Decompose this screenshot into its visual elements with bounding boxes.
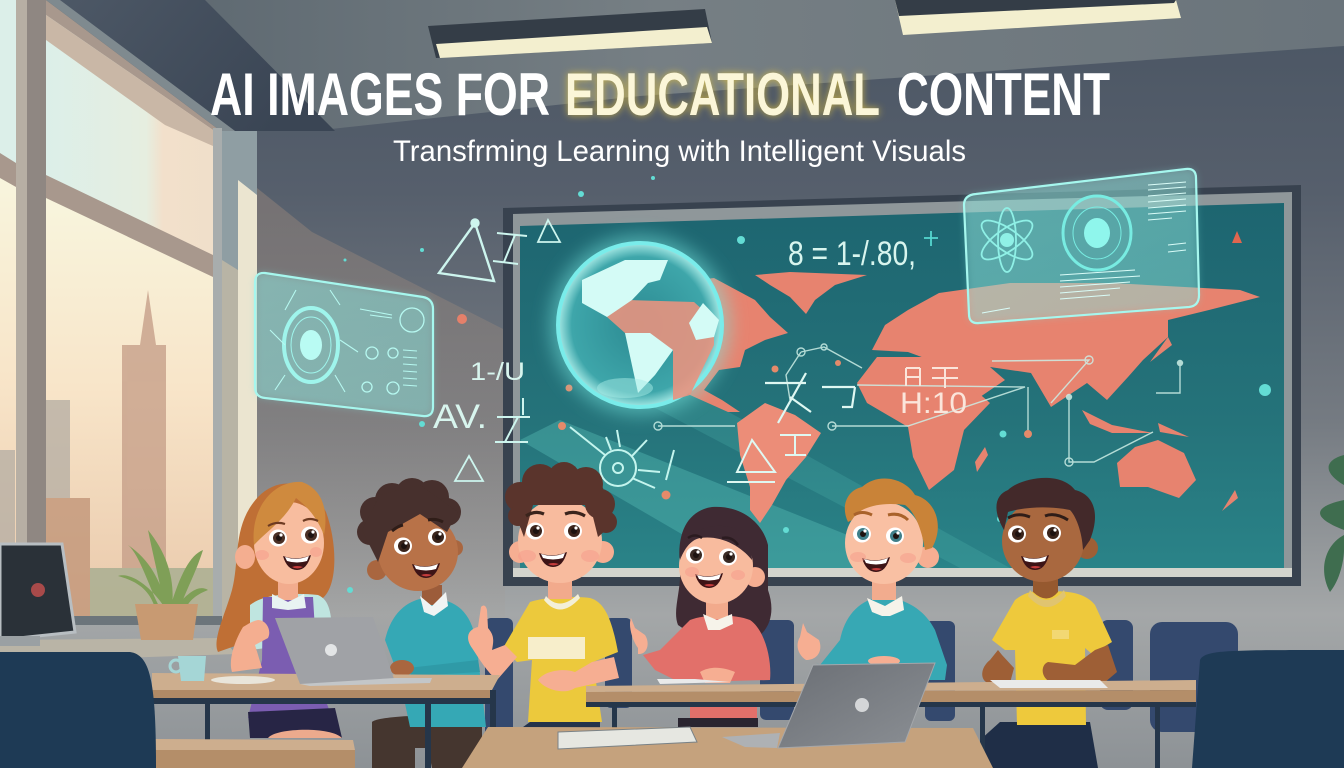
orange triangle [1232, 231, 1242, 243]
title: AI images for: AI IMAGES FOR [210, 61, 550, 128]
subtitle: Transfrming Learning with Intelligent Visuals [393, 135, 966, 168]
plus sign [924, 231, 938, 246]
pane upper frame tint [46, 15, 213, 146]
continent: south america [737, 403, 821, 523]
continent: greenland [755, 272, 867, 314]
coffee mug [170, 656, 206, 681]
circuit icon [570, 427, 674, 488]
pane lower left [0, 178, 16, 620]
plant on sill [118, 530, 208, 640]
title: educational: EDUCATIONAL [565, 61, 880, 128]
floating dots [457, 314, 467, 324]
board dots [592, 236, 1271, 533]
continent: australia [1117, 440, 1196, 498]
equation on board: 8 = 1-/.80, [788, 235, 916, 273]
student 2: boy in teal [357, 478, 486, 768]
math formula lower: AV. [433, 398, 487, 436]
student 5: blond boy in teal [798, 478, 947, 682]
window sill [0, 638, 236, 662]
right hologram panel [964, 169, 1199, 323]
left hologram panel [255, 273, 433, 416]
monitor at window [0, 544, 75, 646]
sun beams on board [520, 420, 930, 568]
foreground chair right [1192, 650, 1344, 768]
pane lower main [46, 198, 213, 620]
continent: eurasia [872, 283, 1260, 407]
dark window soffit [60, 0, 335, 131]
student 1: girl with red hair [216, 482, 342, 738]
corner wall sun tint [257, 188, 505, 660]
pane top main [46, 15, 213, 255]
foreground chair left [0, 652, 156, 768]
student 4: girl in pink [630, 507, 771, 727]
pane top left [0, 0, 16, 163]
ceiling [200, 0, 1344, 131]
right wall plant [1320, 455, 1344, 592]
title: content: CONTENT [897, 61, 1110, 128]
left desk [152, 673, 500, 768]
window pillar [222, 131, 257, 651]
left front desk [155, 739, 355, 768]
continent: africa [857, 357, 990, 490]
orange board dots [558, 360, 1032, 500]
continent: islands [975, 337, 1238, 511]
cyan floating dots [344, 176, 655, 593]
formula on africa: H:10 [900, 387, 967, 420]
title highlight glow: EDUCATIONAL [565, 61, 880, 128]
math formula: 1-/U [470, 358, 525, 386]
front laptop [722, 663, 935, 748]
student 3: boy in yellow [468, 462, 619, 768]
background chairs [485, 618, 1238, 738]
ceiling light left [428, 9, 712, 58]
left laptop [275, 617, 432, 686]
window [0, 0, 235, 625]
student 6: boy in yellow [980, 478, 1117, 768]
glowing globe [550, 235, 730, 415]
central geometry marks [765, 373, 855, 423]
symbols above formula [906, 368, 958, 388]
continent: north america [628, 278, 788, 412]
triangle on south america [727, 435, 811, 482]
network lines [654, 344, 1182, 466]
right desk [586, 679, 1196, 768]
floating math symbols [439, 220, 560, 481]
blackboard map [503, 185, 1301, 586]
front desk [462, 727, 993, 768]
ceiling light right [895, 0, 1181, 35]
